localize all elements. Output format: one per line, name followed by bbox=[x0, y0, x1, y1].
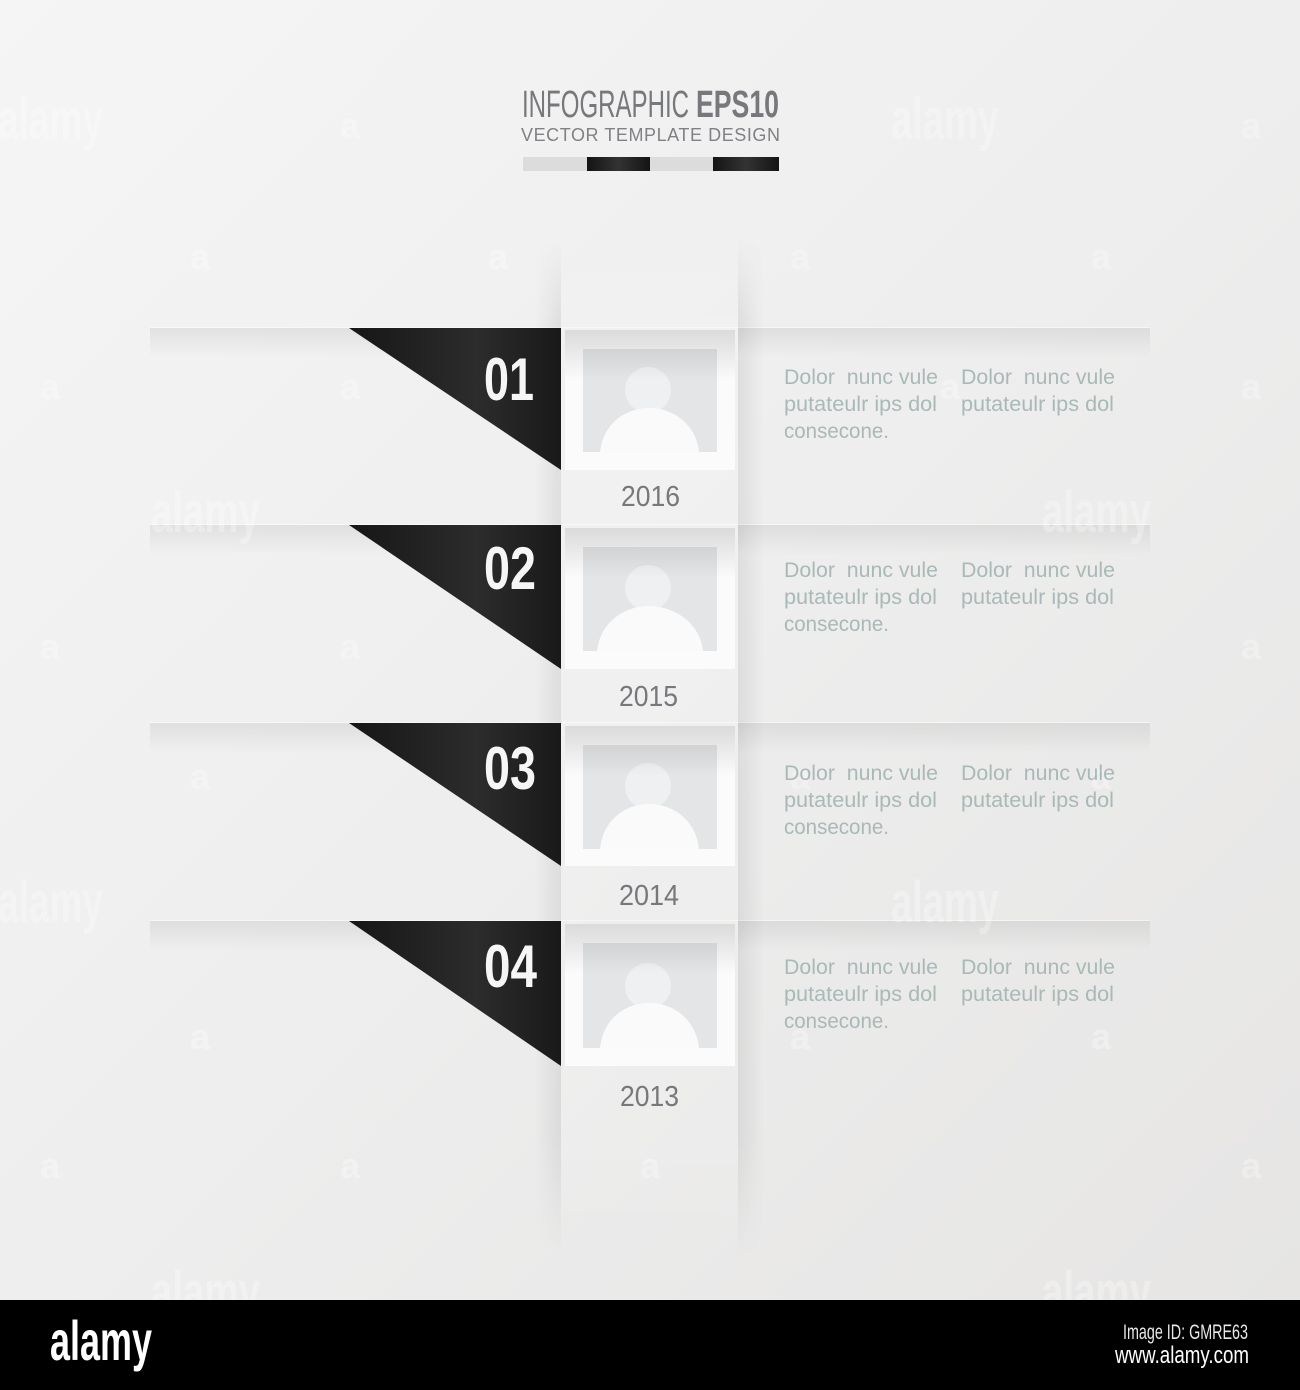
description: Dolor nunc vule bbox=[961, 559, 1115, 582]
watermarks: alamy bbox=[1042, 480, 1151, 545]
watermarks: alamy bbox=[891, 870, 999, 935]
watermarks: a bbox=[340, 366, 361, 407]
year: 2016 bbox=[621, 481, 680, 513]
number 04: 04 bbox=[484, 933, 537, 1000]
description: Dolor nunc vule bbox=[784, 366, 938, 389]
vertical timeline column bbox=[548, 276, 752, 1200]
triangle marker 04 bbox=[349, 921, 561, 1066]
watermarks: a bbox=[790, 756, 811, 797]
description bbox=[784, 559, 1115, 636]
watermarks: a bbox=[1091, 1016, 1112, 1057]
watermarks: a bbox=[790, 1016, 811, 1057]
year: 2013 bbox=[620, 1081, 679, 1113]
row 4: 2013 bbox=[349, 921, 1115, 1113]
segmented bar bbox=[523, 157, 779, 171]
watermarks: alamy bbox=[1042, 1260, 1151, 1325]
watermarks: a bbox=[940, 366, 961, 407]
watermarks: alamy bbox=[151, 1260, 260, 1325]
watermarks: a bbox=[190, 236, 211, 277]
description: consecone. bbox=[784, 1010, 889, 1033]
watermarks: a bbox=[40, 366, 61, 407]
description bbox=[784, 762, 1115, 839]
heading: INFOGRAPHIC bbox=[522, 84, 689, 126]
website: www.alamy.com bbox=[1114, 1342, 1249, 1369]
description: Dolor nunc vule bbox=[784, 559, 938, 582]
description: Dolor nunc vule bbox=[784, 762, 938, 785]
year: 2015 bbox=[619, 681, 678, 713]
heading: EPS10 bbox=[696, 84, 779, 126]
subheading: VECTOR TEMPLATE DESIGN bbox=[521, 125, 780, 145]
description: consecone. bbox=[784, 613, 889, 636]
triangle marker 01 bbox=[349, 328, 561, 470]
band shadows bbox=[150, 327, 1150, 951]
description: consecone. bbox=[784, 816, 889, 839]
watermarks: a bbox=[1241, 1145, 1262, 1186]
watermarks: a bbox=[40, 626, 61, 667]
watermarks: alamy bbox=[891, 87, 999, 152]
watermarks: a bbox=[40, 1145, 61, 1186]
description: putateulr ips dol bbox=[961, 789, 1114, 812]
watermarks: alamy bbox=[0, 870, 103, 935]
description: Dolor nunc vule bbox=[784, 956, 938, 979]
description: putateulr ips dol bbox=[784, 393, 937, 416]
watermarks: a bbox=[1241, 626, 1262, 667]
footer logo: alamy bbox=[50, 1309, 152, 1372]
watermarks: alamy bbox=[151, 480, 260, 545]
description bbox=[784, 366, 1115, 443]
triangle marker 03 bbox=[349, 723, 561, 866]
watermarks: a bbox=[1091, 236, 1112, 277]
number 01: 01 bbox=[484, 346, 534, 413]
number 03: 03 bbox=[484, 735, 536, 802]
description: Dolor nunc vule bbox=[961, 762, 1115, 785]
description: putateulr ips dol bbox=[784, 586, 937, 609]
photo card bbox=[565, 528, 735, 669]
watermarks: alamy bbox=[0, 87, 103, 152]
description: putateulr ips dol bbox=[784, 789, 937, 812]
description: Dolor nunc vule bbox=[961, 366, 1115, 389]
description: putateulr ips dol bbox=[961, 393, 1114, 416]
description: consecone. bbox=[784, 420, 889, 443]
footer bar bbox=[0, 1300, 1300, 1390]
row 3: 2014 bbox=[349, 723, 1115, 912]
row 2: 2015 bbox=[349, 525, 1115, 713]
watermarks: a bbox=[790, 236, 811, 277]
watermarks: a bbox=[640, 1145, 661, 1186]
watermarks: a bbox=[340, 105, 361, 146]
title block bbox=[521, 84, 780, 171]
watermarks: a bbox=[1241, 105, 1262, 146]
watermarks: a bbox=[340, 626, 361, 667]
description bbox=[784, 956, 1115, 1033]
description: putateulr ips dol bbox=[961, 983, 1114, 1006]
watermarks: a bbox=[488, 236, 509, 277]
watermarks: a bbox=[190, 756, 211, 797]
photo card bbox=[565, 726, 735, 866]
description: putateulr ips dol bbox=[784, 983, 937, 1006]
photo card bbox=[565, 330, 735, 470]
triangle marker 02 bbox=[349, 525, 561, 669]
description: Dolor nunc vule bbox=[961, 956, 1115, 979]
watermarks: a bbox=[340, 1145, 361, 1186]
number 02: 02 bbox=[484, 535, 536, 602]
description: putateulr ips dol bbox=[961, 586, 1114, 609]
row 1: 2016 bbox=[349, 328, 1115, 513]
watermarks: a bbox=[1091, 756, 1112, 797]
year: 2014 bbox=[619, 880, 679, 912]
watermarks: a bbox=[1241, 366, 1262, 407]
watermarks: a bbox=[190, 1016, 211, 1057]
photo card bbox=[565, 924, 735, 1066]
